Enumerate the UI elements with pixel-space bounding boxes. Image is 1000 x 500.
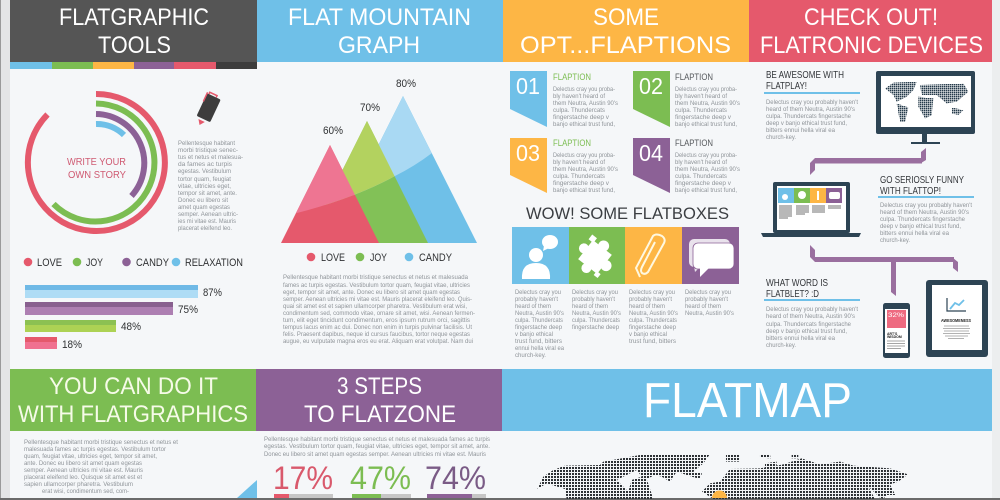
text block [24,440,178,495]
legend: LOVE [321,252,345,264]
flaption 04: banjo ethical trust fund, [675,188,737,194]
text block: Pellentesque habitant [178,141,235,147]
flatbox captions: heard of them [572,304,608,310]
text block: augue, eu vulputate magna eros eu erat. Aliquam erat volutpat. Nam dui [283,339,473,345]
header: flatmap [502,369,992,431]
flaption 03: banjo ethical trust fund, [553,188,615,194]
text block: eget, tempor sit amet, ante. Donec eu libero sit amet quam egestas [283,290,460,296]
block: flatblet: church-key. [766,343,796,349]
block: flatplay: culpa. Thundercats fingerstache [766,114,852,120]
block: flattop: GO SERIOSLY FUNNY [880,175,964,186]
text block [178,141,243,232]
block: flattop: heard of them Neutra, Austin 90's [880,210,969,216]
legend: RELAXATION [185,257,243,269]
panel: you can do it [10,369,257,498]
header: flatgraphic tools: TOOLS [98,32,171,59]
flaption 01: bly haven't heard of [553,94,605,100]
icon: phone: ART'S [887,332,898,336]
flatbox captions: v banjo ethical [515,332,553,338]
flaption 02 [633,71,740,128]
block: flatblet: culpa. Thundercats fingerstache [766,322,852,328]
map marker [712,490,727,498]
text block: placerat eleifend leo. [178,226,232,232]
text block: egestas. Vestibulum [178,169,231,175]
header: flatronic devices [749,0,992,62]
bar chart: 75% [178,304,198,316]
block: flatblet: heard of them Neutra, Austin 90's [766,314,855,320]
connector: laptop to phone and tablet [810,245,958,296]
icon: phone [883,303,910,358]
text block: felis. Praesent dapibus, neque id cursus faucibus, tortor neque egestas [283,332,470,338]
block: flatplay: BE AWESOME WITH [766,70,844,81]
panel: 3 steps [256,369,502,498]
flaption 01: FLAPTION [553,72,591,82]
text block: ies mi vitae est. Mauris [178,219,236,225]
header: some flaptions: SOME [593,4,659,31]
flatbox captions: Neutra, Austin 90's [685,311,734,317]
flatbox captions: probably haven't [572,297,615,303]
block: flattop: culpa. Thundercats fingerstache [880,217,966,223]
text block: Pellentesque habitant morbi tristique senectus et netus et malesuada fames ac turpis [264,437,490,443]
flatbox captions: probably haven't [685,297,728,303]
text block: tempor sit amet, ante. [178,191,237,197]
text block: amet quam egestas [178,205,230,211]
step 2: 47% [350,460,411,496]
flaption 02: them Neutra, Austin 90's [675,101,740,107]
flaption 01 [510,71,618,128]
icon: monitor with world map [876,71,975,144]
flaption 04 [633,138,740,194]
flaption 03: fingerstache deep v [553,181,609,187]
flaption 02: bly haven't heard of [675,94,727,100]
dot world map [537,454,908,499]
legend: CANDY [136,257,170,269]
icon: laptop [761,182,861,237]
text block: semper. Aenean ultricies mi vitae est. Mauris placerat eleifend leo. Quis- [283,297,472,303]
flaption 04: fingerstache deep v [675,181,731,187]
block: flatplay: bitters ennui hella viral ea [766,128,836,134]
legend: JOY [86,257,104,269]
step 3: 74% [425,460,486,496]
flaption 02: banjo ethical trust fund, [675,122,737,128]
text block: Donec eu libero sit [178,198,228,204]
flatbox captions: church-key. [515,353,546,359]
radial chart [28,94,165,231]
block: flatplay: church-key. [766,135,796,141]
text block: ante. Donec eu libero sit amet quam egestas [24,461,142,467]
flatbox captions: probably haven't [515,297,558,303]
step 1: 17% [273,460,333,496]
block: flatblet [764,278,860,349]
header: 3 steps: 3 STEPS [337,373,422,400]
flatbox 3: paperclip [625,227,682,284]
block: flatplay: deep v banjo ethical trust fund, [766,121,847,127]
header: flat mountain graph: FLAT MOUNTAIN [288,4,471,31]
header: some flaptions: OPT...FLAPTIONS [520,32,731,59]
panel: some flaptions [503,0,749,359]
flatbox captions: culpa. Thundercats [515,318,563,324]
block: flatblet: WHAT WORD IS [766,278,828,289]
flatbox 2: puzzle [568,227,625,284]
flatbox 1: person [512,227,569,284]
header: you can do it: WITH FLATGRAPHICS [18,401,248,428]
flatbox captions: Delectus cray you [515,290,561,296]
flatbox captions: culpa. Thundercats [572,318,620,324]
text block: malesuada fames ac turpis egestas. Vestibulum tortor [24,447,166,453]
header: you can do it: YOU CAN DO IT [49,373,218,400]
flatbox captions: Delectus cray you [629,290,675,296]
text block: Pellentesque habitant morbi tristique senectus et netus et malesuada [283,275,469,281]
text block: fames ac turpis egestas. Vestibulum tortor quam, feugiat vitae, ultricies [283,283,470,289]
text block: semper. Aenean ultricies mi vitae est. Mauris [24,468,143,474]
flatbox captions: v banjo ethical [629,332,667,338]
panel: flatmap [502,369,992,499]
text block: placerat eleifend leo. Quisque sit amet est et [24,475,142,481]
flatbox captions: probably haven't [629,297,672,303]
block: flatblet: FLATBLET? :D [766,289,819,300]
panel: flatgraphic tools [10,0,257,351]
header: flatgraphic tools [10,0,257,62]
flaption 03 [510,138,618,194]
text block: quam, feugiat vitae, ultricies eget, tempor sit amet, [24,454,157,460]
text block: sapien ullamcorper pharetra. Vestibulum [24,482,133,488]
header: some flaptions [503,0,749,62]
mountain chart: 70% [360,102,380,114]
block: flattop: bitters ennui hella viral ea [880,231,950,237]
text block: Donec eu libero sit amet quam egestas semper. Aenean ultricies mi vitae est. Mauris [264,452,486,458]
flatbox captions: Neutra, Austin 90's [629,311,678,317]
block: flatplay [764,70,860,141]
legend: CANDY [419,252,453,264]
text block [264,437,490,458]
flatbox captions: Neutra, Austin 90's [572,311,621,317]
block: flattop [878,175,974,244]
flatbox captions: fingerstache deep [515,325,563,331]
flatbox captions: trust fund, bitters [515,339,562,345]
legend: JOY [370,252,388,264]
flatbox captions: Delectus cray you [685,290,731,296]
flaption 03: them Neutra, Austin 90's [553,167,618,173]
panel: flatronic devices [749,0,992,358]
flaption 03: Delectus cray you proba- [553,153,615,159]
flatbox captions: culpa. Thundercats [629,318,677,324]
block: flattop: WITH FLATTOP! [880,186,941,197]
flatbox captions: fingerstache deep [572,325,620,331]
header: you can do it [10,369,256,431]
text block: tus et netus et malesua- [178,155,243,161]
header: 3 steps: TO FLATZONE [304,401,456,428]
flatbox captions: heard of them [685,304,721,310]
flaption 04: them Neutra, Austin 90's [675,167,740,173]
text block: semper. Aenean ultric- [178,212,238,218]
text block: da fames ac turpis [178,162,232,168]
flaption 02: FLAPTION [675,72,713,82]
flatbox captions: ennui hella viral ea [515,346,565,352]
colour strip [10,62,257,69]
icon: tablet: AWESOMENESS [941,318,971,323]
flatbox captions [515,290,734,359]
icon: tablet [926,280,988,357]
text block: egestas. Vestibulum tortor quam, feugiat vitae, ultricies eget, tempor sit amet, ante. [264,444,490,450]
block: flattop: Delectus cray you probably haven't [880,203,972,209]
block: flattop: deep v banjo ethical trust fund, [880,224,961,230]
panel: flat mountain graph [257,0,503,345]
flaption 04: FLAPTION [675,138,713,148]
text block: Pellentesque habitant morbi tristique senectus et netus et [24,440,178,446]
flatbox captions: Neutra, Austin 90's [515,311,564,317]
flaption 03: bly haven't heard of [553,160,605,166]
chart label: OWN STORY [68,169,126,181]
header: flatronic devices: CHECK OUT! [804,4,938,31]
flaption 04: 04 [639,140,663,166]
text block: condimentum sed, commodo vitae, ornare sit amet, wisi. Aenean fermen- [283,311,475,317]
text block: vitae, ultricies eget, [178,184,231,190]
text block: tempus lacus enim ac dui. Donec non enim in turpis pulvinar facilisis. Ut [283,325,472,331]
flatbox captions: Delectus cray you [572,290,618,296]
block: flatplay: heard of them Neutra, Austin 90's [766,107,855,113]
block: flatblet: Delectus cray you probably haven't [766,307,858,313]
icon: phone: WISDOM [887,335,902,339]
flaption 01: fingerstache deep v [553,115,609,121]
header: flatgraphic tools: FLATGRAPHIC [59,4,209,31]
text block: morbi tristique senec- [178,148,238,154]
flaption 01: Delectus cray you proba- [553,87,615,93]
legend [24,257,243,269]
mountain chart: 60% [323,125,343,137]
flatbox captions: trust fund, bitters [629,339,676,345]
block: flatplay: FLATPLAY! [766,81,807,92]
header: flatmap: FLATMAP [643,374,852,428]
flaption 04: bly haven't heard of [675,160,727,166]
chart label: WRITE YOUR [67,156,126,168]
flaption 02: culpa. Thundercats [675,108,727,114]
text block: tortor quam, feugiat [178,177,231,183]
flatbox captions: heard of them [515,304,551,310]
text block [283,275,475,345]
flaption 01: banjo ethical trust fund, [553,122,615,128]
connector: monitor to laptop [810,148,926,175]
bar chart: 48% [121,321,141,333]
block: flattop: church-key. [880,238,910,244]
legend: LOVE [37,257,62,269]
flaption 03: 03 [516,140,540,166]
block: flatblet: bitters ennui hella viral ea [766,336,836,342]
flaption 02: 02 [639,73,663,99]
icon: pen [194,91,222,129]
flatbox captions: heard of them [629,304,665,310]
flaption 01: culpa. Thundercats [553,108,605,114]
flaption 04: Delectus cray you proba- [675,153,737,159]
flaption 03: FLAPTION [553,138,591,148]
text block: quai sit amet est et sapien ullamcorper pharetra. Vestibulum erat wisi, [283,304,467,310]
mountain chart [281,78,477,243]
bar chart [25,285,222,351]
flaption 02: Delectus cray you proba- [675,87,737,93]
bar chart: 18% [62,339,82,351]
flaption 04: culpa. Thundercats [675,174,727,180]
flaption 02: fingerstache deep v [675,115,731,121]
icon: phone: 32% [888,313,905,319]
text block: tum, elit eget tincidunt condimentum, eros ipsum rutrum orci, sagittis [283,318,470,324]
arrow corner [237,480,257,498]
flaption 01: them Neutra, Austin 90's [553,101,618,107]
flatbox captions: fingerstache deep [629,325,677,331]
block: flatplay: Delectus cray you probably haven't [766,100,858,106]
flaption 01: 01 [516,73,540,99]
bar chart: 87% [203,287,222,299]
text block: erat wisi, condimentum sed, com- [42,489,129,495]
chart label [67,156,126,181]
header: flat mountain graph [257,0,503,62]
block: flatblet: deep v banjo ethical trust fund, [766,329,847,335]
flatbox 4: chat bubbles [682,227,739,284]
legend [307,252,453,264]
flaption 03: culpa. Thundercats [553,174,605,180]
header: flat mountain graph: GRAPH [338,32,420,59]
header: flatronic devices: FLATRONIC DEVICES [760,32,983,59]
mountain chart: 80% [396,78,416,90]
heading: flatboxes: WOW! SOME FLATBOXES [526,204,729,223]
header: 3 steps [256,369,502,431]
